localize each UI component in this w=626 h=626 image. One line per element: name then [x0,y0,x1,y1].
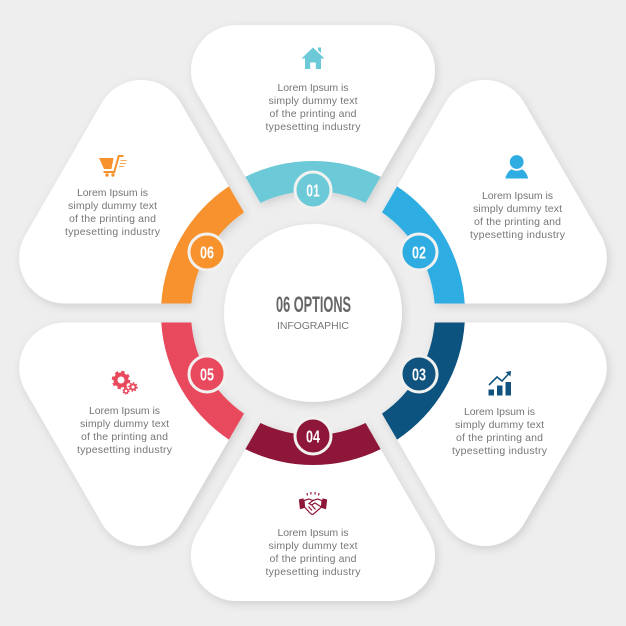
icon: house [302,48,324,69]
text block 02: typesetting industry [470,229,566,241]
panel: option 03 [370,275,623,563]
text block 04 [266,527,361,578]
text block 03: typesetting industry [452,445,548,457]
badge 06 [189,234,225,270]
badge 04 [295,418,331,454]
panel: option 06 [3,63,256,351]
icon: user [505,155,528,178]
text block 05 [77,405,173,456]
text block 05: Lorem Ipsum is [89,405,160,417]
text block 05: typesetting industry [77,444,173,456]
text block 04: Lorem Ipsum is [278,527,348,539]
text block 01 [266,82,361,133]
badge 02: 02 [412,242,426,262]
text block 05: simply dummy text [80,418,169,430]
panel: option 05 [3,275,256,563]
text block 04: simply dummy text [268,540,358,552]
text block 01: Lorem Ipsum is [278,82,348,94]
panel: option 01 [191,25,435,208]
text block 02: Lorem Ipsum is [482,190,553,202]
panel: option 04 [191,418,435,601]
badge 01 [295,172,331,208]
icon: growth chart [488,371,511,396]
badge 03 [401,356,437,392]
text block 06 [65,187,161,238]
subtitle: INFOGRAPHIC [277,320,349,332]
text block 01: of the printing and [270,108,357,120]
badge 02 [401,234,437,270]
center circle [224,224,402,402]
text block 03: of the printing and [456,432,543,444]
panel: option 02 [370,63,623,351]
text block 03: simply dummy text [455,419,544,431]
badge 05 [189,356,225,392]
title: 06 OPTIONS [276,292,351,317]
badge 05: 05 [200,364,214,384]
text block 06: of the printing and [69,213,156,225]
text block 03 [452,406,548,457]
text block 06: simply dummy text [68,200,157,212]
text block 06: typesetting industry [65,226,161,238]
text block 04: of the printing and [270,553,357,565]
text block 01: typesetting industry [266,121,361,133]
badge 01: 01 [306,180,320,200]
icon: handshake [300,492,326,514]
icon: shopping cart [99,155,126,177]
text block 06: Lorem Ipsum is [77,187,148,199]
text block 05: of the printing and [81,431,168,443]
text block 01: simply dummy text [268,95,358,107]
badge 06: 06 [200,242,214,262]
icon: gears [113,372,137,394]
text block 04: typesetting industry [266,566,361,578]
text block 03: Lorem Ipsum is [464,406,535,418]
badge 03: 03 [412,364,426,384]
text block 02: of the printing and [474,216,561,228]
text block 02 [470,190,566,241]
text block 02: simply dummy text [473,203,562,215]
badge 04: 04 [306,426,320,446]
